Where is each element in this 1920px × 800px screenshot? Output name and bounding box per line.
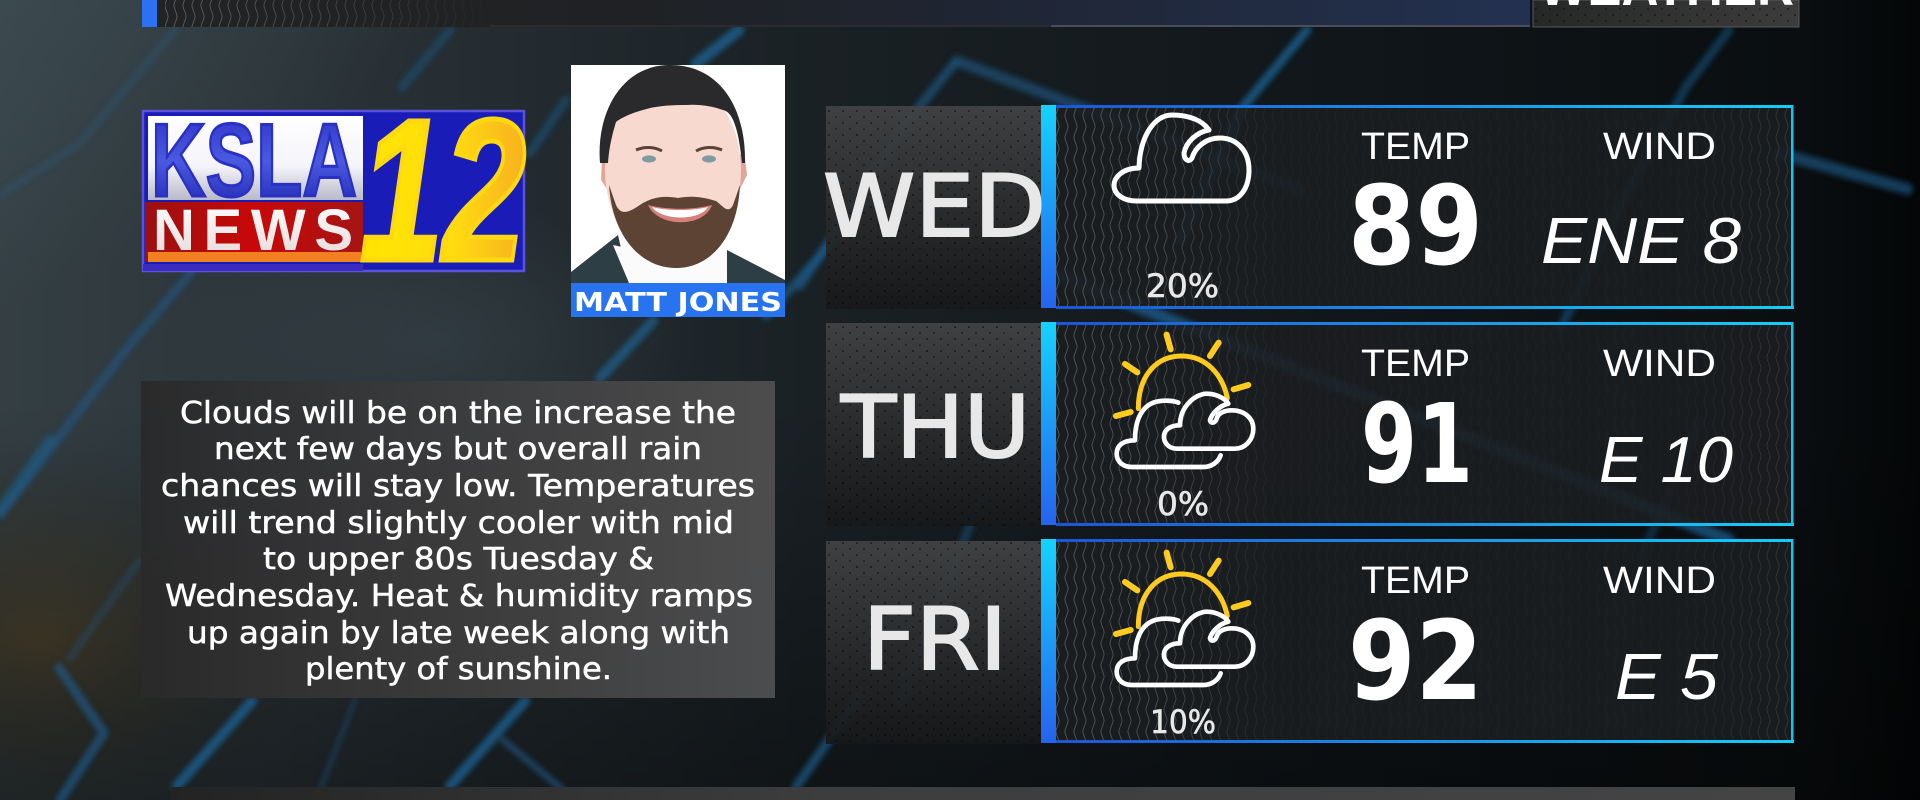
text block: forecast discussion: Clouds will be on the increase the [180,396,736,431]
text block: forecast discussion: Wednesday. Heat & humidity ramps [165,579,753,614]
wind value: ENE 8 [1541,204,1741,277]
top banner: header bar with blue accent [142,0,1533,27]
wind value: E 10 [1599,423,1733,496]
text block: forecast discussion: next few days but overall rain [214,432,702,467]
text block: forecast discussion: chances will stay low. Temperatures [161,469,755,504]
temperature value: 92 [1348,597,1483,725]
rain chance: 10% [1150,703,1216,741]
icon: sun behind clouds [1116,335,1253,467]
temperature value: 91 [1361,380,1473,508]
logo: KSLA News 12: 12 [360,77,526,303]
icon: cloud [1114,115,1249,201]
wind label: WIND [1603,126,1716,168]
presenter photo: illustrated head and shoulders: MATT JONES [574,288,782,318]
logo: KSLA News 12: KSLA [151,103,357,219]
day label: THU [840,378,1030,478]
bottom bar [171,787,1795,800]
text block: forecast discussion: to upper 80s Tuesday & [263,542,654,577]
text block: forecast discussion: will trend slightly cooler with mid [183,506,734,541]
wind label: WIND [1603,343,1716,385]
day label: WED [823,157,1046,257]
temperature label: TEMP [1361,343,1470,385]
text block: forecast discussion: plenty of sunshine. [305,652,612,687]
logo: KSLA News 12: NEWS [153,198,353,263]
wind label: WIND [1603,560,1716,602]
panel: Thursday forecast [826,322,1794,526]
temperature value: 89 [1348,162,1483,290]
rain chance: 20% [1146,267,1219,305]
icon: sun behind clouds [1116,553,1253,685]
text block: forecast discussion: up again by late week along with [187,616,730,651]
panel: Wednesday forecast [823,105,1794,309]
temperature label: TEMP [1361,126,1470,168]
rain chance: 0% [1157,485,1209,523]
temperature label: TEMP [1361,560,1470,602]
presenter photo: illustrated head and shoulders [571,65,785,318]
wind value: E 5 [1615,640,1719,713]
text block: forecast discussion [141,381,775,698]
day label: FRI [863,590,1007,690]
panel: Friday forecast [826,539,1794,744]
logo: KSLA News 12 [143,77,526,303]
header tag: WEATHER [1533,0,1799,27]
